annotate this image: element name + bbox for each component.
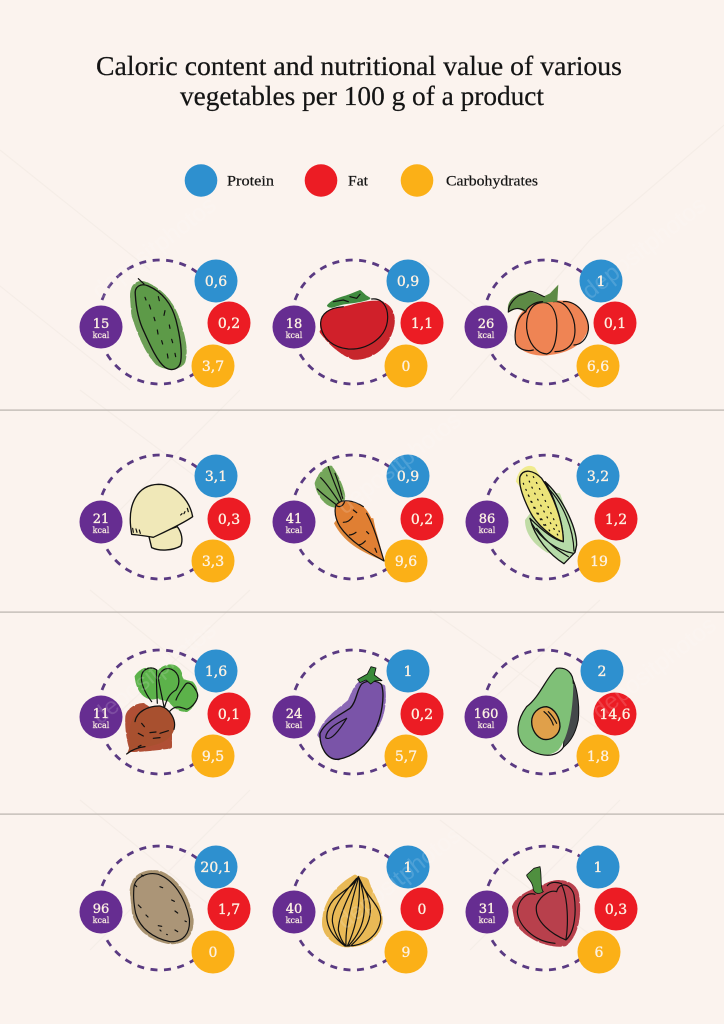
protein badge — [194, 650, 238, 692]
calories badge — [80, 500, 122, 544]
protein badge: 1,6 — [205, 664, 227, 680]
fat badge: 0,2 — [218, 316, 240, 332]
card: avocado — [464, 650, 636, 778]
icon: cucumber — [132, 279, 185, 369]
fat badge — [594, 302, 636, 344]
fat badge — [594, 692, 636, 736]
fat badge — [208, 888, 250, 930]
carbohydrates badge — [384, 540, 428, 582]
watermark — [87, 191, 721, 935]
icon: carrot — [317, 467, 384, 561]
calories badge — [466, 890, 508, 934]
icon: red pepper — [514, 867, 578, 945]
protein badge: 1 — [404, 664, 412, 680]
card: red pepper — [466, 846, 638, 974]
icon: eggplant — [319, 667, 384, 759]
carbohydrates badge — [578, 540, 620, 582]
card: carrot — [272, 454, 444, 582]
fat badge — [208, 692, 250, 736]
calories badge: 86 — [479, 512, 495, 527]
legend — [185, 164, 538, 197]
protein badge: 1 — [404, 860, 412, 876]
carbohydrates badge — [384, 344, 428, 388]
fat badge: 0,2 — [411, 512, 433, 528]
fat badge: 0,1 — [218, 707, 240, 723]
icon: beet — [127, 666, 198, 754]
carbohydrates badge: 3,7 — [202, 359, 224, 375]
icon: tomato — [320, 291, 393, 358]
title — [96, 51, 622, 111]
carbohydrates badge: 5,7 — [395, 749, 417, 765]
fat badge: 1,1 — [411, 316, 433, 332]
card: cucumber — [80, 260, 250, 388]
fat badge: 0,2 — [411, 707, 433, 723]
title: Caloric content and nutritional value of various — [96, 51, 622, 81]
card: beet — [80, 650, 250, 778]
fat badge — [400, 302, 444, 344]
protein badge — [194, 260, 238, 302]
fat badge: 0,3 — [218, 512, 240, 528]
protein badge — [580, 260, 622, 302]
calories badge: 21 — [93, 512, 109, 527]
fat badge: 0,3 — [605, 902, 627, 918]
calories badge: kcal — [478, 721, 495, 730]
calories badge — [80, 696, 122, 738]
calories badge: 24 — [286, 707, 302, 722]
calories badge — [80, 890, 122, 934]
calories badge: kcal — [286, 331, 303, 340]
card: onion — [272, 846, 444, 974]
fat badge — [400, 692, 444, 736]
protein badge: 0,9 — [397, 469, 419, 485]
card: mushroom — [80, 454, 250, 582]
card: tomato — [272, 260, 444, 388]
icon: pumpkin — [508, 285, 588, 356]
calories badge — [272, 306, 316, 348]
protein badge: 1 — [594, 860, 602, 876]
carbohydrates badge — [192, 344, 234, 388]
calories badge — [272, 500, 316, 544]
carbohydrates badge: 9,6 — [395, 554, 417, 570]
calories badge: kcal — [93, 721, 110, 730]
watermark: depositphotos — [332, 821, 466, 935]
calories badge: 18 — [286, 317, 302, 332]
protein badge — [386, 846, 430, 888]
protein badge: 2 — [598, 664, 606, 680]
fat badge — [208, 302, 250, 344]
protein badge: 0,9 — [397, 274, 419, 290]
fat badge: 0,1 — [604, 316, 626, 332]
icon: potato — [132, 872, 192, 942]
calories badge: kcal — [479, 526, 496, 535]
calories badge: kcal — [93, 526, 110, 535]
calories badge: 31 — [479, 902, 495, 917]
carbohydrates badge: 9 — [402, 945, 410, 961]
carbohydrates badge — [192, 540, 234, 582]
protein badge — [576, 846, 620, 888]
fat badge — [208, 498, 250, 540]
calories badge: kcal — [478, 331, 495, 340]
card: corn — [466, 454, 638, 582]
fat badge — [400, 498, 444, 540]
protein badge — [194, 846, 238, 888]
fat badge: 0 — [418, 902, 426, 918]
calories badge — [466, 500, 508, 544]
protein badge: 0,6 — [205, 274, 227, 290]
title: vegetables per 100 g of a product — [180, 81, 545, 111]
calories badge: kcal — [286, 721, 303, 730]
legend: Carbohydrates — [446, 174, 538, 190]
card: potato — [80, 846, 250, 974]
protein badge: 1 — [597, 274, 605, 290]
watermark: depositphotos — [87, 616, 221, 730]
calories badge: kcal — [286, 526, 303, 535]
calories badge: 96 — [93, 902, 109, 917]
card: eggplant — [272, 650, 444, 778]
icon: onion — [324, 877, 381, 946]
calories badge: kcal — [93, 331, 110, 340]
legend: Fat — [348, 174, 368, 190]
carbohydrates badge: 6 — [595, 945, 604, 961]
fat badge — [594, 498, 638, 540]
carbohydrates badge: 6,6 — [587, 359, 609, 375]
calories badge — [464, 696, 508, 738]
icon: mushroom — [130, 484, 193, 550]
legend: Protein — [227, 174, 275, 190]
fat badge: 1,2 — [605, 512, 627, 528]
fat badge — [594, 888, 638, 930]
carbohydrates badge — [384, 930, 428, 974]
calories badge: 40 — [286, 902, 302, 917]
calories badge — [272, 696, 316, 738]
watermark: depositphotos — [587, 611, 721, 725]
carbohydrates badge: 1,8 — [587, 749, 609, 765]
carbohydrates badge: 0 — [209, 945, 217, 961]
icon: corn — [516, 466, 577, 564]
protein badge: 3,2 — [587, 469, 609, 485]
fat badge — [400, 888, 444, 930]
carbohydrates badge — [576, 344, 620, 388]
calories badge: 41 — [286, 512, 302, 527]
carbohydrates badge: 9,5 — [202, 749, 224, 765]
card: pumpkin — [464, 260, 636, 388]
carbohydrates badge: 0 — [402, 359, 410, 375]
carbohydrates badge — [192, 930, 234, 974]
calories badge — [464, 306, 508, 348]
carbohydrates badge — [576, 734, 620, 778]
carbohydrates badge — [192, 734, 234, 778]
calories badge: 26 — [478, 317, 494, 332]
watermark: depositphotos — [332, 406, 466, 520]
calories badge: kcal — [286, 916, 303, 925]
calories badge — [272, 890, 316, 934]
carbohydrates badge — [578, 930, 620, 974]
protein badge — [386, 650, 430, 692]
calories badge: kcal — [93, 916, 110, 925]
protein badge — [386, 260, 430, 302]
carbohydrates badge: 19 — [590, 554, 608, 570]
protein badge — [194, 454, 238, 498]
calories badge: 15 — [93, 317, 109, 332]
carbohydrates badge: 3,3 — [202, 554, 224, 570]
protein badge: 3,1 — [205, 469, 227, 485]
icon: avocado — [518, 668, 579, 755]
protein badge — [580, 650, 624, 692]
calories badge: kcal — [479, 916, 496, 925]
calories badge: 160 — [474, 707, 498, 722]
fat badge: 1,7 — [218, 902, 240, 918]
protein badge — [576, 454, 620, 498]
protein badge: 20,1 — [200, 860, 232, 876]
calories badge — [80, 306, 122, 348]
protein badge — [386, 454, 430, 498]
fat badge: 14,6 — [599, 707, 631, 723]
carbohydrates badge — [384, 734, 428, 778]
watermark: depositphotos — [577, 191, 711, 305]
watermark: depositphotos — [87, 191, 221, 305]
calories badge: 11 — [93, 707, 109, 722]
